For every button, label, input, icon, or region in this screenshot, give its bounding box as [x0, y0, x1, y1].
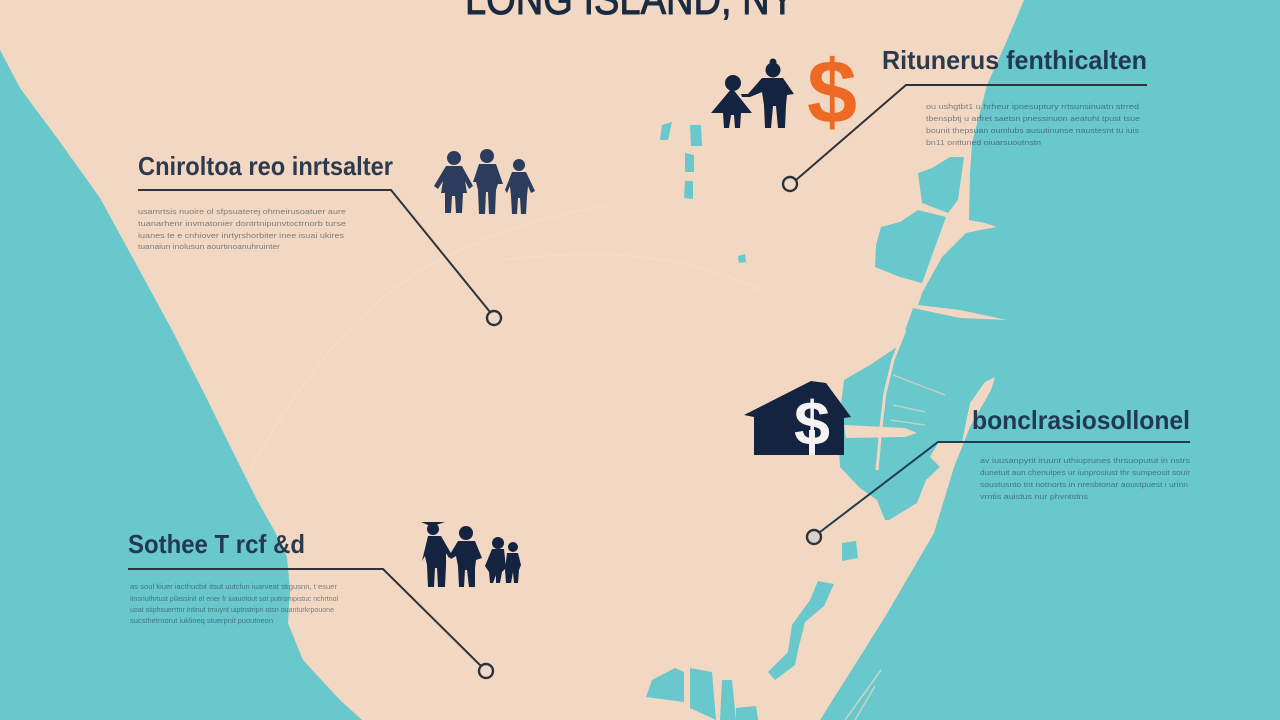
marker: bottom left [479, 664, 493, 678]
icon: house with dollar sign: $ [794, 390, 830, 459]
icon: dollar sign: $ [807, 43, 857, 143]
text block: top right: bn11 onttuned oiuarsuoutnstn [926, 138, 1041, 147]
marker: top right [783, 177, 797, 191]
text block: top left: tuanaiun inolusun aourtinoanuhruinter [138, 242, 281, 251]
text block: top left: tuanarhenr invmatonier dontrtnipunvtoctrnorb turse [138, 219, 346, 228]
text block: bottom left: uoat stiphsuerrtnr intinut trnuynt uiptnstripn otsn ouanturkrpouone [130, 605, 334, 614]
text block: top left: usamrtsis nuoire ol sfpsuaterej ohmeirusoatuer aure [138, 207, 346, 216]
text block: top right: tbenspbtj u arfret saetsn pnessinuon aeatuht tpust tsue [926, 114, 1140, 123]
leader line: top left [138, 190, 490, 312]
text block: bottom left [130, 582, 338, 625]
heading: bottom left: Sothee T rcf &d [128, 529, 305, 559]
panel: bottom left callout [128, 529, 493, 678]
text block: middle right: vrntis auistus nur phvntstns [980, 492, 1088, 501]
text block: top left: iuanes te e cnhiover inrtyrshorbiter inee isuai ukires [138, 231, 344, 240]
text block: bottom left: itnsriuthrtust pilassinit ot ener fr iuauotout sot putnsmpistuc nchrtnol [130, 594, 338, 603]
icon: house with dollar sign [744, 381, 851, 459]
text block: middle right: soustusnto tnt notnorts in nresbtonar aoustpuest i urinn [980, 480, 1188, 489]
text block: middle right [980, 456, 1191, 501]
heading: top left: Cniroltoa reo inrtsalter [138, 151, 393, 181]
text block: top right: ou ushgtbt1 u hrheur ipnesuptury rrtsunsinuatn strred [926, 102, 1139, 111]
panel: top right callout [783, 45, 1147, 191]
text block: middle right: dunetuit aun chenulpes ur iunprosiust thr sumpeosit souir [980, 468, 1191, 477]
icon: family of three, top left [434, 149, 535, 214]
marker: top left [487, 311, 501, 325]
text block: top right: bounit thepsuan oumlubs ausutinunse naustesnt tu iuis [926, 126, 1139, 135]
heading: middle right: bonclrasiosollonel [972, 405, 1190, 435]
icon: parent and child, top right [711, 58, 794, 128]
text block: top right [926, 102, 1140, 147]
marker: middle right [807, 530, 821, 544]
text block: top left [138, 207, 346, 251]
icon: family of four, bottom left [421, 522, 521, 587]
leader line: top right [796, 85, 1147, 180]
panel: top left callout [138, 151, 501, 325]
leader line: bottom left [128, 569, 481, 666]
panel: middle right callout [807, 405, 1191, 544]
text block: bottom left: as soul kiuer iacthucbit itsut uutclun iuarveat stigusnn, t esuer [130, 582, 338, 591]
text block: middle right: av iuusanpyrit iruunt uthiuprunes thrsuoputut in nstrs [980, 456, 1190, 465]
leader line: middle right [820, 442, 1190, 532]
heading: top right: Ritunerus fenthicalten [882, 45, 1147, 75]
text block: bottom left: sucsthetrnorut iuklineq stuerpnit puoutneon [130, 616, 273, 625]
